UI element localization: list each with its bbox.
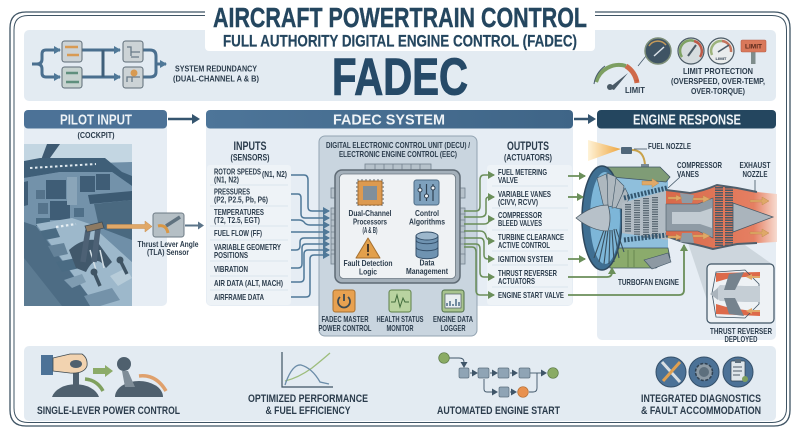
label: control algorithms: Algorithms — [409, 216, 445, 226]
sensor list: VARIABLE GEOMETRY — [214, 242, 281, 252]
sensor list: AIR DATA (ALT, MACH) — [214, 278, 283, 288]
tail cone — [733, 203, 773, 232]
label: SINGLE-LEVER POWER CONTROL — [37, 405, 180, 417]
icons: limit gauges and sign — [645, 38, 766, 64]
label — [248, 393, 368, 417]
feature: automated engine start — [437, 353, 560, 417]
actuator list: ACTIVE CONTROL — [498, 240, 550, 250]
icon: control algorithms — [414, 180, 439, 205]
sensor list: (P2, P2.5, Pb, P6) — [214, 194, 268, 204]
sensor list: POSITIONS — [214, 250, 248, 260]
hot section body and exhaust — [666, 185, 777, 249]
sensor list: PRESSURES — [214, 186, 250, 196]
flowchart — [439, 353, 558, 397]
panel: electronic engine control unit — [318, 136, 477, 336]
sensor list: (N1, N2) — [262, 169, 287, 179]
label: limit protection: (OVERSPEED, OVER-TEMP, — [671, 76, 765, 86]
label: thrust reverser deployed: DEPLOYED — [724, 334, 758, 344]
sensor list — [214, 166, 287, 302]
icon: limit arc gauge — [594, 56, 646, 90]
label: system redundancy — [173, 64, 259, 84]
bypass duct — [610, 176, 668, 254]
top band panel — [24, 30, 776, 101]
label: fault detection logic — [344, 258, 392, 276]
callout connector — [688, 243, 772, 300]
label: fault detection logic: Logic — [359, 266, 377, 276]
control: master power: FADEC MASTER — [322, 314, 368, 324]
main heading FADEC: FADEC — [332, 48, 468, 106]
label: dual-channel processors: Processors — [353, 216, 387, 226]
label: TLA sensor: Thrust Lever Angle — [138, 239, 199, 249]
label: INTEGRATED DIAGNOSTICS — [641, 393, 761, 405]
actuator list: ENGINE START VALVE — [498, 290, 564, 300]
control: master power: POWER CONTROL — [318, 323, 372, 333]
icon: thrust lever angle sensor — [153, 213, 184, 237]
bottom band panel — [24, 346, 776, 421]
control: health status monitor — [376, 290, 424, 333]
control: engine data logger — [433, 290, 473, 333]
sensor list: (N1, N2) — [214, 174, 239, 184]
actuator list: VALVE — [498, 175, 518, 185]
heading: outputs: OUTPUTS — [507, 139, 549, 153]
label: control algorithms: Control — [415, 208, 439, 218]
arrow: TLA sensor to FADEC — [185, 222, 204, 230]
control: health status monitor: MONITOR — [386, 323, 414, 333]
sensor list: VIBRATION — [214, 264, 248, 274]
illustration: cockpit — [24, 144, 132, 306]
arrows: actuators to engine — [568, 176, 684, 295]
actuator list: IGNITION SYSTEM — [498, 254, 553, 264]
label: system redundancy: SYSTEM REDUNDANCY — [175, 64, 257, 74]
heading: pilot input: PILOT INPUT — [60, 112, 132, 128]
arrow: pilot input to FADEC system — [168, 118, 198, 120]
icon: data storage — [416, 232, 438, 259]
panel: engine response — [576, 110, 777, 344]
heading: outputs: (ACTUATORS) — [504, 152, 552, 162]
label: limit protection: LIMIT PROTECTION — [683, 66, 753, 76]
label: limit protection — [671, 66, 765, 96]
heading: FADEC system: FADEC SYSTEM — [333, 112, 445, 128]
label: turbofan engine: TURBOFAN ENGINE — [618, 277, 679, 287]
subtitle: FULL AUTHORITY DIGITAL ENGINE CONTROL (FADEC) — [223, 32, 577, 50]
label: cockpit: (COCKPIT) — [78, 130, 115, 140]
heading: inputs: (SENSORS) — [230, 152, 270, 162]
actuator list: (CIVV, RCVV) — [498, 197, 538, 207]
sensor list: ROTOR SPEEDS — [214, 166, 261, 176]
icon: processor chip — [356, 179, 384, 206]
actuator list: COMPRESSOR — [498, 210, 542, 220]
label: control algorithms — [409, 208, 445, 226]
inset: thrust reverser — [707, 264, 774, 323]
icon: fault warning — [356, 238, 380, 258]
nacelle — [604, 167, 671, 269]
label: AUTOMATED ENGINE START — [437, 405, 560, 417]
heading: DECU / EEC: ELECTRONIC ENGINE CONTROL (EEC) — [339, 149, 457, 159]
label: dual-channel processors: Dual-Channel — [348, 208, 392, 218]
label: TLA sensor — [138, 239, 199, 257]
label: system redundancy: (DUAL-CHANNEL A & B) — [173, 74, 259, 84]
label: & FUEL EFFICIENCY — [266, 405, 351, 417]
arrow: lever to TLA sensor — [107, 221, 152, 232]
actuator list — [498, 167, 564, 300]
actuator list: TURBINE CLEARANCE — [498, 232, 564, 242]
sensor list: (T2, T2.5, EGT) — [214, 215, 260, 225]
icon: limit arc gauge: + — [635, 78, 639, 85]
label — [641, 393, 761, 417]
spinner — [576, 205, 610, 231]
actuator list: THRUST REVERSER — [498, 268, 557, 278]
label: dual-channel processors — [348, 208, 392, 235]
diagram: turbofan engine — [576, 166, 777, 270]
arrows: sensors into control unit — [291, 175, 329, 297]
heading: inputs: INPUTS — [234, 139, 266, 153]
panel: FADEC system — [206, 110, 573, 306]
icons: limit gauges and sign: LIMIT — [745, 44, 762, 50]
label: exhaust nozzle — [740, 160, 771, 192]
control: engine data logger: ENGINE DATA — [433, 314, 473, 324]
heading: engine response: ENGINE RESPONSE — [633, 112, 741, 128]
label: limit protection: OVER-TORQUE) — [691, 86, 745, 96]
actuator list: BLEED VALVES — [498, 218, 542, 228]
flow arrows — [642, 178, 769, 240]
icon: hand on lever — [41, 354, 166, 397]
arrow: FADEC system to engine response — [574, 118, 594, 120]
control: engine data logger: LOGGER — [440, 323, 466, 333]
control: master power — [318, 290, 372, 333]
actuator list: VARIABLE VANES — [498, 189, 551, 199]
panel: inputs list — [207, 139, 291, 305]
actuator list: ACTUATORS — [498, 276, 535, 286]
title: AIRCRAFT POWERTRAIN CONTROL — [213, 2, 587, 33]
feature: integrated diagnostics — [641, 357, 761, 417]
label: limit: LIMIT — [625, 85, 646, 95]
heading: FADEC system — [206, 110, 573, 128]
fan — [582, 166, 630, 270]
title tab — [205, 0, 595, 51]
panel: outputs list — [487, 139, 572, 305]
label: TLA sensor: (TLA) Sensor — [147, 247, 190, 257]
diagram: system redundancy — [32, 41, 166, 88]
feature: optimized performance — [248, 352, 368, 417]
heading: DECU / EEC — [326, 140, 470, 159]
label: compressor vanes: COMPRESSOR — [677, 160, 722, 170]
label: fuel nozzle: FUEL NOZZLE — [648, 141, 691, 151]
sensor list: FUEL FLOW (FF) — [214, 228, 262, 238]
label: data management: Data — [420, 258, 435, 268]
chart: performance curves — [282, 352, 333, 387]
panel: pilot input — [24, 110, 199, 306]
heading: inputs — [230, 139, 270, 162]
icons: tools, gear, checklist — [656, 357, 753, 387]
heading: outputs — [504, 139, 552, 162]
label: data management — [406, 258, 448, 276]
heading: pilot input — [24, 110, 167, 128]
control: health status monitor: HEALTH STATUS — [376, 314, 424, 324]
core — [666, 198, 713, 238]
label: exhaust nozzle: EXHAUST — [740, 160, 771, 170]
label: compressor vanes — [668, 160, 722, 188]
label: fault detection logic: Fault Detection — [344, 258, 392, 268]
device: processor enclosure — [331, 164, 465, 283]
heading: DECU / EEC: DIGITAL ELECTRONIC CONTROL UNIT (DECU) / — [326, 140, 470, 150]
label: thrust reverser deployed — [710, 326, 772, 344]
actuator list: FUEL METERING — [498, 167, 547, 177]
label: & FAULT ACCOMMODATION — [641, 405, 761, 417]
turbine — [719, 187, 729, 247]
label: fuel nozzle — [634, 141, 691, 151]
label: thrust reverser deployed: THRUST REVERSER — [710, 326, 772, 336]
label: data management: Management — [406, 266, 448, 276]
label: exhaust nozzle: NOZZLE — [742, 169, 768, 179]
sensor list: TEMPERATURES — [214, 207, 264, 217]
icons: limit gauges and sign: LIMIT — [716, 56, 727, 61]
arrows: control unit to actuators — [464, 175, 494, 295]
label: compressor vanes: VANES — [677, 169, 699, 179]
label: dual-channel processors: (A & B) — [362, 225, 378, 235]
feature: single-lever power control — [37, 354, 180, 417]
compressor — [622, 188, 668, 240]
icon: fuel nozzle with flame — [588, 140, 649, 176]
label: OPTIMIZED PERFORMANCE — [248, 393, 368, 405]
sensor list: AIRFRAME DATA — [214, 292, 264, 302]
